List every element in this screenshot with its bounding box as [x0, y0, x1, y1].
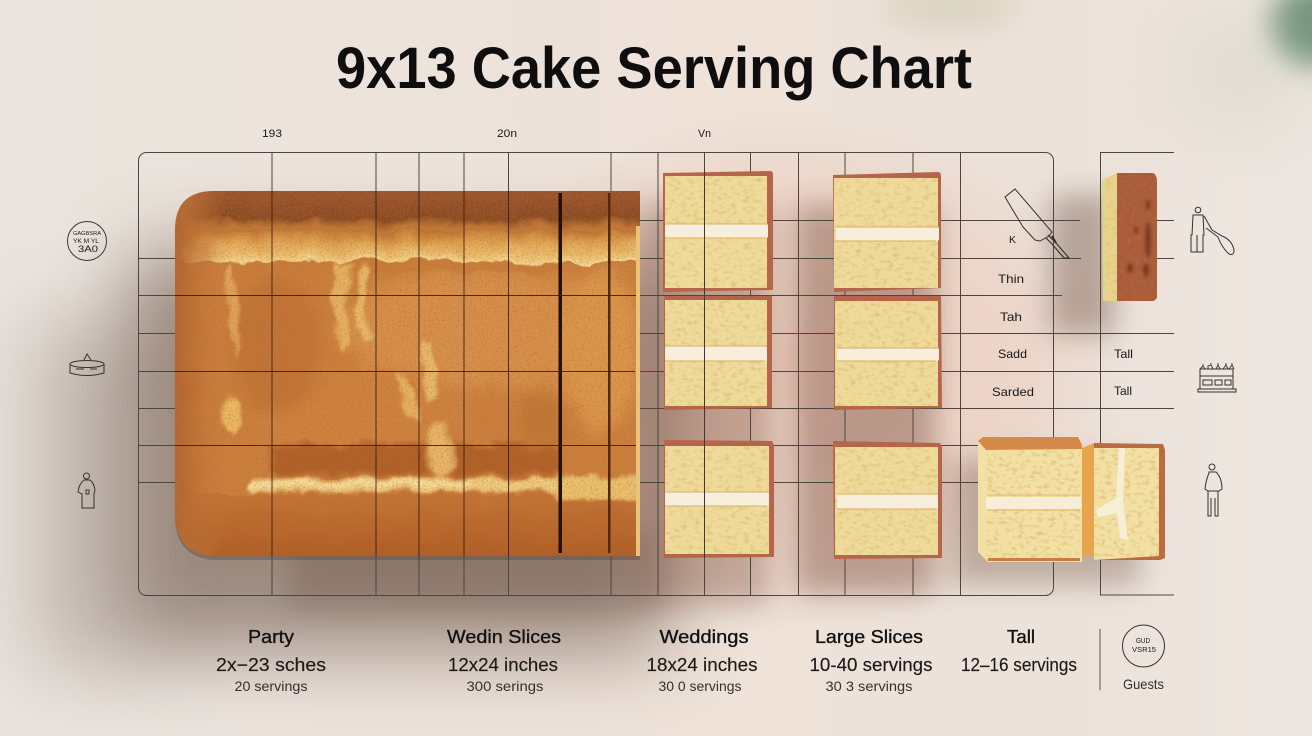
column label: Wedin Slices: Wedin Slices: [447, 626, 561, 647]
column label: Wedin Slices: [447, 626, 561, 694]
slice B1: [833, 172, 941, 292]
split side slice: [1082, 443, 1165, 560]
icon: left badge: YK M YL: [73, 239, 100, 245]
column label: Tall: [961, 626, 1077, 675]
column label: Tall: Tall: [1007, 626, 1035, 647]
column label: Party: 2x−23 sches: [216, 655, 326, 675]
slice cuts: [558, 193, 610, 553]
table row labels: K: [1009, 234, 1016, 246]
table row labels: [992, 234, 1133, 399]
title: 9x13 Cake Serving Chart: [336, 36, 972, 101]
knife icon: [1005, 189, 1069, 258]
guests icon: [1122, 625, 1164, 667]
chart grid: [138, 152, 1174, 596]
slice A1: [663, 171, 773, 292]
top axis labels: [262, 128, 711, 140]
slice B2: [834, 296, 942, 410]
slice B3: [833, 441, 942, 559]
tall slice: [978, 437, 1082, 562]
divider and guests badge: [1100, 625, 1164, 692]
guests label: Guests: [1123, 676, 1164, 692]
column label: Wedin Slices: 300 serings: [466, 678, 544, 694]
column label: Large Slices: 30 3 servings: [826, 678, 912, 694]
table row labels: Thin: [998, 272, 1024, 286]
column label: Wedin Slices: 12x24 inches: [448, 655, 558, 675]
top axis labels: Vn: [698, 128, 711, 140]
column label: Party: Party: [248, 626, 295, 647]
table row labels: Tall: [1114, 347, 1133, 361]
column label: Party: [216, 626, 326, 694]
whole 9x13 sheet cake: [175, 191, 640, 560]
icon: left cake: [70, 354, 104, 376]
guests icon: VSR15: [1132, 647, 1156, 654]
column label: Party: 20 servings: [234, 678, 308, 694]
icon: left person: [78, 473, 95, 508]
guide line over slices: [704, 171, 706, 558]
sponge end slice: [1102, 173, 1157, 301]
slice A3: [664, 440, 774, 558]
top axis labels: 193: [262, 128, 282, 140]
column label: Tall: 12–16 servings: [961, 655, 1077, 675]
table row labels: Sarded: [992, 385, 1034, 399]
table row labels: Tall: [1114, 384, 1132, 398]
column label: Large Slices: Large Slices: [815, 626, 923, 647]
cut lines over cake: [175, 191, 636, 556]
slice A2: [664, 296, 772, 410]
table row labels: Tah: [1000, 310, 1022, 324]
column label: Weddings: 30 0 servings: [658, 678, 742, 694]
column: layered slices A: [663, 171, 774, 558]
icon: person with knife: [1191, 207, 1234, 254]
column: layered slices B: [833, 172, 942, 559]
column label: Weddings: Weddings: [660, 626, 748, 647]
icon: left badge: [68, 222, 106, 260]
icon: left badge: 3A0: [78, 244, 98, 254]
column label: Weddings: [646, 626, 758, 694]
table row labels: Sadd: [998, 347, 1027, 361]
icon: tiered cake stand: [1198, 363, 1236, 392]
icon: standing person: [1205, 464, 1222, 516]
top axis labels: 20n: [497, 128, 517, 140]
column label: Large Slices: 10-40 servings: [810, 655, 932, 675]
icon: left badge: GAGBSRA: [73, 231, 101, 237]
column label: Large Slices: [810, 626, 932, 694]
column label: Weddings: 18x24 inches: [646, 655, 758, 675]
guests icon: GUD: [1136, 638, 1150, 645]
